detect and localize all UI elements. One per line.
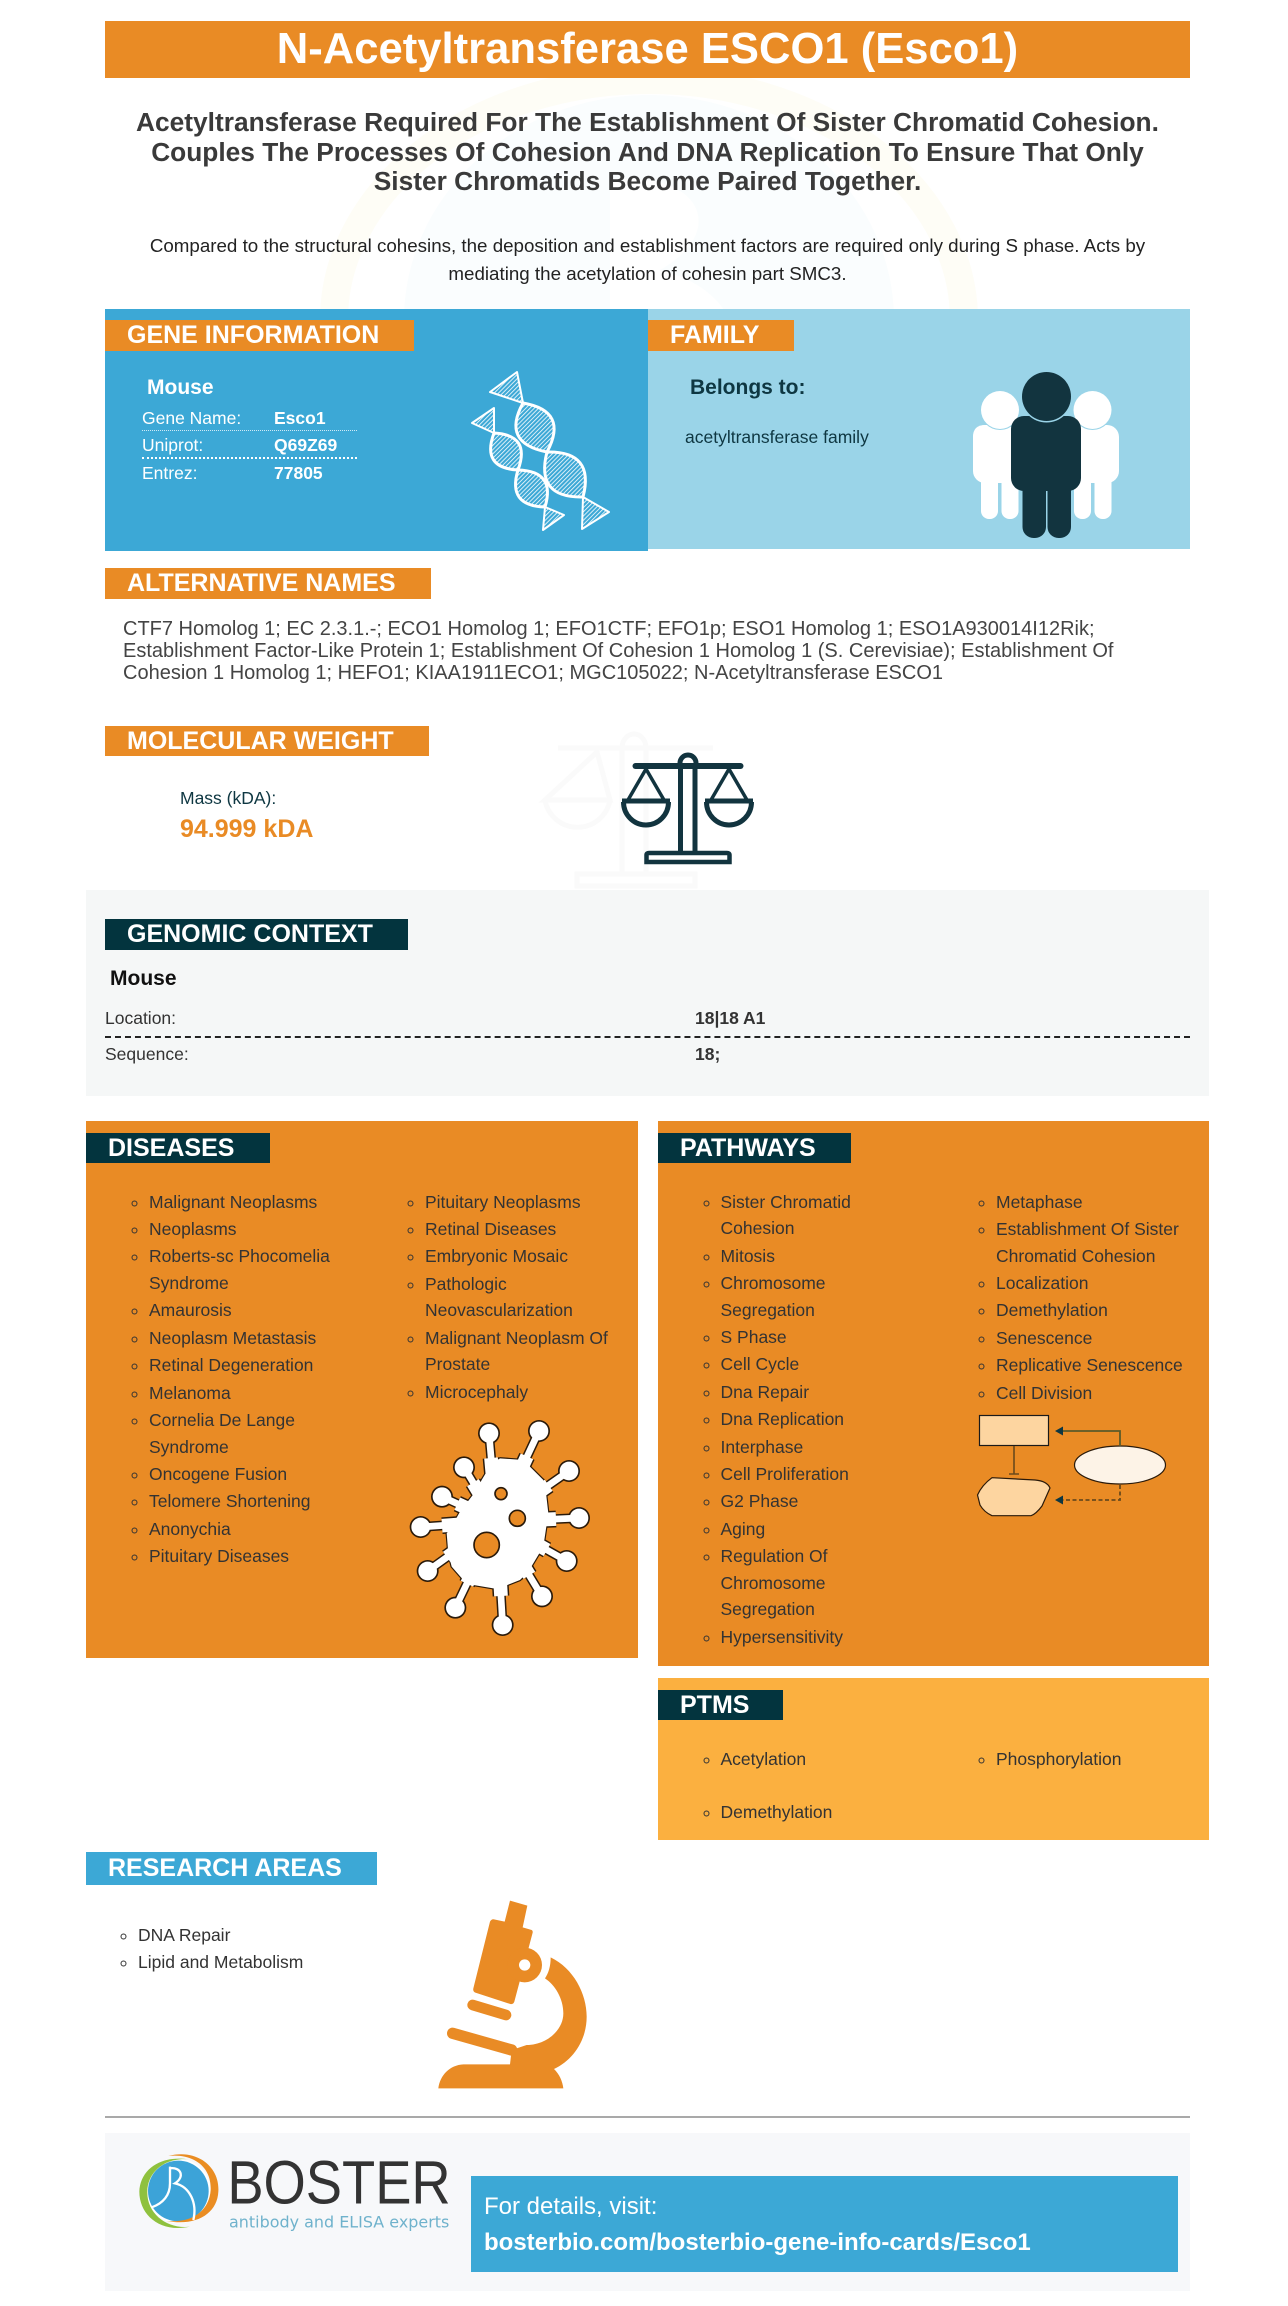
pathways list column 1: Chromosome	[720, 1273, 826, 1293]
heading: family: FAMILY	[670, 321, 759, 349]
heading: family	[648, 320, 794, 351]
heading: genomic context: GENOMIC CONTEXT	[127, 920, 373, 948]
diseases list column 1: Neoplasm Metastasis	[149, 1328, 316, 1348]
pathways list column 1: Cell Proliferation	[720, 1464, 849, 1484]
pathways list column 1: Segregation	[720, 1599, 815, 1619]
pathways list column 2: Demethylation	[996, 1300, 1108, 1320]
panel: pathways	[658, 1121, 1209, 1666]
icon: pathway diagram	[976, 1414, 1166, 1516]
url: bosterbio.com/bosterbio-gene-info-cards/Esco1	[484, 2229, 1031, 2256]
diseases list column 1: Retinal Degeneration	[149, 1355, 313, 1375]
call to action	[471, 2176, 1178, 2272]
heading: research areas: RESEARCH AREAS	[108, 1854, 342, 1882]
diseases list column 1: Anonychia	[149, 1519, 231, 1539]
PTMs list column 2: Phosphorylation	[996, 1749, 1122, 1769]
icon: ghost scales	[535, 728, 725, 890]
diseases list column 1: Melanoma	[149, 1383, 231, 1403]
heading: research areas	[86, 1852, 377, 1885]
diseases list column 2: Prostate	[425, 1354, 490, 1374]
research areas list: Lipid and Metabolism	[138, 1952, 303, 1972]
diseases list column 1: Syndrome	[149, 1273, 229, 1293]
PTMs list column 1: Demethylation	[720, 1802, 832, 1822]
gene info table: Q69Z69	[274, 435, 337, 455]
logo: Boster: antibody and ELISA experts	[229, 2212, 449, 2231]
pathways list column 2: Metaphase	[996, 1192, 1083, 1212]
pathways list column 1: Regulation Of	[720, 1546, 828, 1566]
diseases list column 1	[132, 1192, 330, 1566]
pathways list column 1: Sister Chromatid	[720, 1192, 851, 1212]
gene info table: 77805	[274, 463, 323, 483]
pathways list column 1	[704, 1192, 851, 1647]
gene info table	[142, 408, 357, 483]
genomic table: 18|18 A1	[695, 1008, 765, 1028]
alternative names text	[123, 618, 1114, 684]
icon: microscope	[438, 1900, 587, 2088]
research areas list: DNA Repair	[138, 1925, 230, 1945]
pathways list column 2: Localization	[996, 1273, 1088, 1293]
diseases list column 2: Retinal Diseases	[425, 1219, 556, 1239]
panel: family	[648, 309, 1190, 549]
decorative watermark	[320, 78, 978, 309]
pathways list column 1: Aging	[720, 1519, 765, 1539]
visit label: For details, visit:	[484, 2193, 657, 2220]
subtitle: Couples The Processes Of Cohesion And DNA Replication To Ensure That Only	[151, 136, 1144, 166]
pathways list column 2: Cell Division	[996, 1383, 1092, 1403]
diseases list column 2: Pathologic	[425, 1274, 507, 1294]
icon: balance scales	[621, 752, 754, 864]
diseases list column 2: Microcephaly	[425, 1382, 528, 1402]
family name: acetyltransferase family	[685, 427, 869, 447]
heading: molecular weight: MOLECULAR WEIGHT	[127, 727, 394, 755]
diseases list column 1: Neoplasms	[149, 1219, 237, 1239]
heading: pathways: PATHWAYS	[680, 1134, 816, 1162]
pathways list column 1: S Phase	[720, 1327, 787, 1347]
panel: PTMs	[658, 1678, 1209, 1840]
pathways list column 1: Cohesion	[720, 1218, 794, 1238]
gene info table: Entrez:	[142, 463, 197, 483]
description: mediating the acetylation of cohesin part SMC3.	[448, 263, 847, 284]
mass value: 94.999 kDA	[180, 815, 313, 843]
pathways list column 1: Hypersensitivity	[720, 1627, 843, 1647]
pathways list column 2: Chromatid Cohesion	[996, 1246, 1156, 1266]
alternative names text: CTF7 Homolog 1; EC 2.3.1.-; ECO1 Homolog 1; EFO1CTF; EFO1p; ESO1 Homolog 1; ESO1A930014I12Rik;	[123, 618, 1095, 640]
belongs to label: Belongs to:	[690, 376, 806, 399]
pathways list column 2	[978, 1192, 1183, 1403]
footer panel	[105, 2133, 1190, 2291]
genomic table: 18;	[695, 1044, 720, 1064]
description	[150, 235, 1145, 284]
alternative names text: Establishment Factor-Like Protein 1; Establishment Of Cohesion 1 Homolog 1 (S. Cerevisiae); Establishment Of	[123, 640, 1113, 662]
diseases list column 1: Pituitary Diseases	[149, 1546, 289, 1566]
divider line	[105, 2116, 1190, 2118]
diseases list column 1: Cornelia De Lange	[149, 1410, 295, 1430]
genomic table	[105, 1008, 1190, 1064]
heading: PTMs	[658, 1690, 783, 1720]
research areas list	[120, 1925, 303, 1972]
gene info table: Esco1	[274, 408, 326, 428]
pathways list column 1: Dna Repair	[720, 1382, 809, 1402]
diseases list column 1: Roberts-sc Phocomelia	[149, 1246, 330, 1266]
PTMs list column 1	[704, 1749, 832, 1822]
pathways list column 1: Segregation	[720, 1300, 815, 1320]
logo: Boster: BOSTER	[227, 2148, 451, 2216]
heading: alternative names: ALTERNATIVE NAMES	[127, 569, 396, 597]
genomic table: Location:	[105, 1008, 176, 1028]
gene info table: Uniprot:	[142, 435, 203, 455]
pathways list column 1: G2 Phase	[720, 1491, 798, 1511]
logo: Boster	[139, 2148, 451, 2231]
pathways list column 1: Interphase	[720, 1437, 803, 1457]
diseases list column 2: Embryonic Mosaic	[425, 1246, 568, 1266]
pathways list column 1: Dna Replication	[720, 1409, 844, 1429]
heading: diseases	[86, 1133, 270, 1163]
species label: Mouse	[110, 967, 177, 990]
subtitle: Sister Chromatids Become Paired Together.	[374, 166, 921, 196]
description: Compared to the structural cohesins, the deposition and establishment factors are required only during S phase. Acts by	[150, 235, 1145, 256]
panel: gene information	[105, 309, 648, 551]
pathways list column 2: Establishment Of Sister	[996, 1219, 1179, 1239]
heading: PTMs: PTMS	[680, 1691, 749, 1719]
heading: pathways	[658, 1133, 851, 1163]
diseases list column 2: Neovascularization	[425, 1300, 573, 1320]
pathways list column 1: Cell Cycle	[720, 1354, 799, 1374]
icon: people group	[973, 372, 1119, 538]
diseases list column 1: Syndrome	[149, 1437, 229, 1457]
heading: gene information: GENE INFORMATION	[127, 321, 379, 349]
subtitle	[136, 107, 1159, 196]
diseases list column 1: Amaurosis	[149, 1300, 232, 1320]
panel: genomic context	[86, 890, 1209, 1096]
alternative names text: Cohesion 1 Homolog 1; HEFO1; KIAA1911ECO1; MGC105022; N-Acetyltransferase ESCO1	[123, 662, 943, 684]
icon: DNA helices	[471, 371, 610, 531]
icon: virus	[410, 1420, 590, 1636]
diseases list column 2: Pituitary Neoplasms	[425, 1192, 581, 1212]
title: N-Acetyltransferase ESCO1 (Esco1)	[277, 25, 1018, 73]
genomic table: Sequence:	[105, 1044, 189, 1064]
mass label: Mass (kDA):	[180, 788, 276, 808]
heading: diseases: DISEASES	[108, 1134, 234, 1162]
title	[105, 21, 1190, 78]
diseases list column 1: Malignant Neoplasms	[149, 1192, 317, 1212]
pathways list column 2: Senescence	[996, 1328, 1092, 1348]
PTMs list column 1: Acetylation	[720, 1749, 806, 1769]
pathways list column 1: Mitosis	[720, 1246, 775, 1266]
diseases list column 2	[408, 1192, 608, 1402]
diseases list column 1: Telomere Shortening	[149, 1491, 310, 1511]
pathways list column 2: Replicative Senescence	[996, 1355, 1183, 1375]
species label: Mouse	[147, 376, 214, 399]
panel: diseases	[86, 1121, 638, 1658]
diseases list column 1: Oncogene Fusion	[149, 1464, 287, 1484]
diseases list column 2: Malignant Neoplasm Of	[425, 1328, 608, 1348]
gene info table: Gene Name:	[142, 408, 241, 428]
pathways list column 1: Chromosome	[720, 1573, 826, 1593]
subtitle: Acetyltransferase Required For The Establishment Of Sister Chromatid Cohesion.	[136, 107, 1159, 137]
